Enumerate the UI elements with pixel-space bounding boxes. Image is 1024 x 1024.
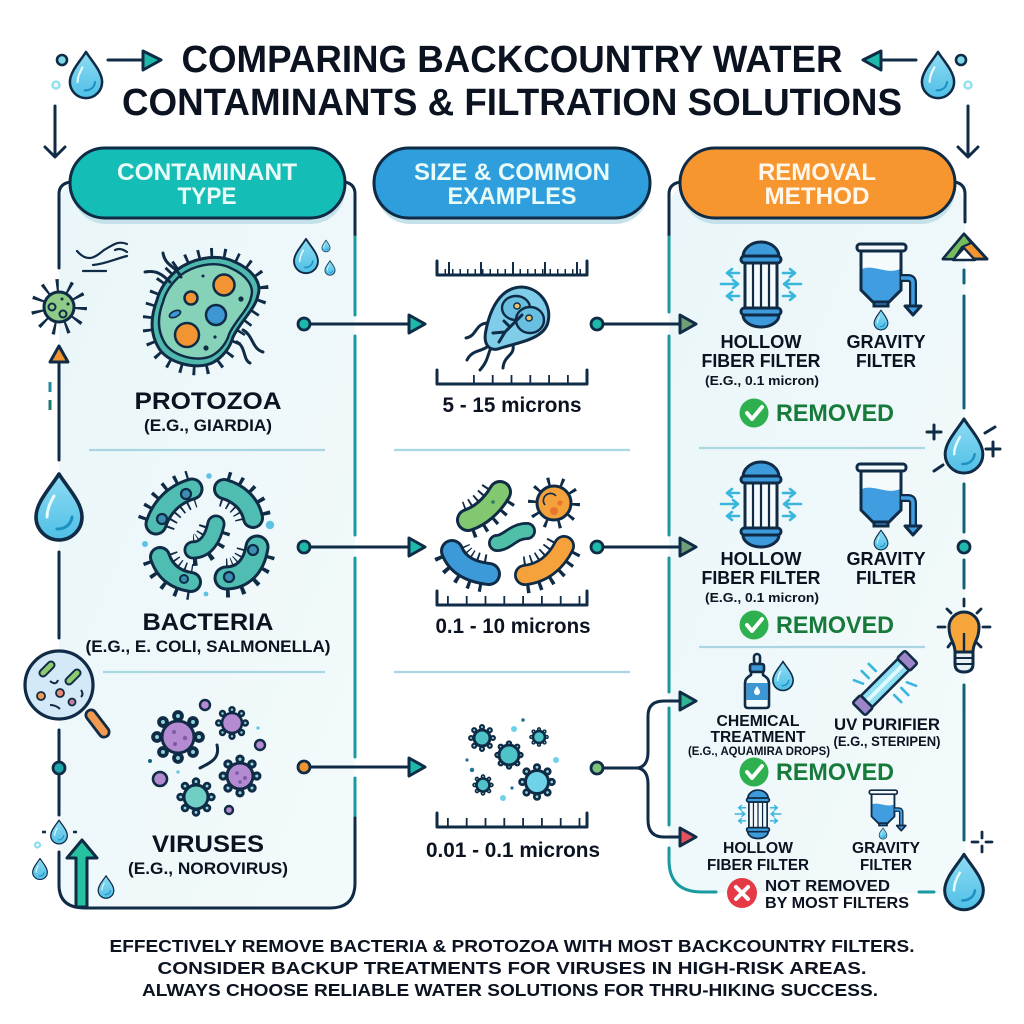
label: gravity filter (846, 332, 926, 371)
row: virus removal (688, 639, 940, 912)
header: removal method (680, 148, 955, 224)
label: hollow fiber filter: FIBER FILTER (702, 568, 821, 588)
icon: gravity filter (857, 244, 921, 330)
header: contaminant type: TYPE (178, 183, 236, 210)
label: viruses: VIRUSES (152, 831, 264, 858)
label: gravity filter: GRAVITY (852, 840, 921, 857)
icon: hollow fiber filter (721, 462, 801, 547)
label: chemical treatment: TREATMENT (710, 729, 806, 746)
icon: water drops near protozoa (294, 239, 335, 275)
label: hollow fiber filter: FIBER FILTER (707, 857, 809, 874)
panel: removal method (669, 148, 965, 912)
icon: protozoa cell (145, 253, 263, 366)
arrow: orange up arrow (50, 346, 68, 410)
label: uv purifier: UV PURIFIER (834, 715, 940, 734)
header: size and common examples (374, 148, 650, 224)
label: hollow fiber filter: HOLLOW (720, 549, 802, 569)
icon: small virus particles (465, 718, 559, 801)
footer summary (110, 936, 914, 1000)
icon: mountain (943, 234, 987, 260)
label: protozoa size: 5 - 15 microns (442, 394, 582, 417)
icon: virus cluster (148, 700, 265, 815)
arrow: green up arrow (67, 840, 97, 907)
arrow: protozoa size to removal (591, 315, 696, 333)
status: removed: REMOVED (776, 400, 894, 427)
row: bacteria removal (702, 462, 926, 640)
status: removed: REMOVED (776, 759, 894, 786)
title: COMPARING BACKCOUNTRY WATER (182, 39, 842, 81)
label: gravity filter: GRAVITY (846, 549, 926, 569)
label: gravity filter (852, 840, 921, 874)
label: viruses (128, 831, 288, 878)
label: viruses: (E.G., NOROVIRUS) (128, 860, 288, 878)
chart: virus size scale (437, 813, 587, 827)
header: contaminant type: CONTAMINANT (117, 159, 297, 186)
decoration: top left drop and arrows (45, 51, 161, 157)
footer summary: CONSIDER BACKUP TREATMENTS FOR VIRUSES IN HIGH-RISK AREAS. (158, 958, 866, 978)
status: not removed: NOT REMOVED (765, 878, 890, 895)
footer summary: EFFECTIVELY REMOVE BACTERIA & PROTOZOA WITH MOST BACKCOUNTRY FILTERS. (110, 936, 914, 956)
icon: magnifier with microbes (25, 651, 104, 732)
icon: stream ripple (77, 243, 127, 271)
chart: protozoa size scale (437, 261, 587, 275)
label: uv purifier (834, 715, 940, 749)
status: not removed: BY MOST FILTERS (765, 895, 909, 912)
status: not removed (727, 878, 909, 912)
label: protozoa: (E.G., GIARDIA) (144, 417, 272, 435)
label: hollow fiber filter: (E.G., 0.1 micron) (705, 373, 819, 388)
label: chemical treatment: (E.G., AQUAMIRA DROPS) (688, 746, 830, 758)
footer summary: ALWAYS CHOOSE RELIABLE WATER SOLUTIONS FOR THRU-HIKING SUCCESS. (142, 980, 878, 1000)
header: size and common examples: EXAMPLES (448, 183, 576, 210)
label: hollow fiber filter (702, 332, 821, 388)
header: size and common examples: SIZE & COMMON (414, 159, 610, 186)
row: protozoa removal (702, 242, 926, 428)
title: CONTAMINANTS & FILTRATION SOLUTIONS (122, 82, 902, 124)
title (122, 39, 902, 124)
arrow: viruses to size (298, 758, 425, 776)
icon: sparkle (972, 832, 992, 852)
status: removed (740, 758, 894, 786)
label: chemical treatment: CHEMICAL (716, 713, 800, 730)
icon: large water drop bottom right (945, 854, 983, 910)
label: hollow fiber filter: HOLLOW (720, 332, 802, 352)
header: contaminant type (70, 148, 345, 224)
label: bacteria (86, 609, 330, 656)
arrow: bacteria to size (298, 538, 425, 556)
icon: uv purifier (841, 639, 929, 727)
icon: bacteria cluster (142, 473, 274, 596)
icon: small hollow fiber filter (735, 790, 781, 839)
status: removed (740, 610, 894, 640)
label: hollow fiber filter: HOLLOW (723, 840, 793, 857)
chart: protozoa lower scale (437, 370, 587, 384)
label: uv purifier: (E.G., STERIPEN) (834, 734, 940, 749)
icon: chemical dropper bottle (745, 654, 793, 708)
label: bacteria size: 0.1 - 10 microns (436, 615, 590, 638)
chart: bacteria size scale (437, 591, 587, 605)
label: chemical treatment (688, 713, 830, 758)
icon: light bulb (938, 599, 990, 672)
icon: small microbe on left edge (38, 286, 80, 328)
panel: size and common examples (374, 148, 650, 862)
label: bacteria: BACTERIA (142, 609, 274, 636)
panel: contaminant type (59, 148, 355, 908)
icon: common bacteria (452, 482, 576, 575)
icon: hollow fiber filter (721, 242, 801, 327)
label: gravity filter: GRAVITY (846, 332, 926, 352)
arrow: protozoa to size (298, 315, 425, 333)
label: bacteria: (E.G., E. COLI, SALMONELLA) (86, 638, 330, 656)
status: removed (740, 398, 894, 428)
icon: large water drop left (36, 474, 82, 540)
label: hollow fiber filter: FIBER FILTER (702, 351, 821, 371)
label: hollow fiber filter (702, 549, 821, 605)
header: removal method: REMOVAL (758, 159, 876, 186)
label: protozoa: PROTOZOA (134, 388, 282, 415)
icon: giardia (466, 287, 549, 370)
label: hollow fiber filter (707, 840, 809, 874)
arrow: virus size branching to removal outcomes (591, 692, 696, 846)
label: virus size: 0.01 - 0.1 microns (426, 839, 600, 862)
icon: water drop with sparkles right (927, 419, 1000, 473)
label: gravity filter (846, 549, 926, 588)
label: gravity filter: FILTER (860, 857, 912, 874)
label: gravity filter: FILTER (856, 568, 916, 588)
label: hollow fiber filter: (E.G., 0.1 micron) (705, 590, 819, 605)
header: removal method: METHOD (764, 183, 870, 210)
label: protozoa (134, 388, 282, 435)
icon: dot on left edge (53, 762, 65, 774)
arrow: bacteria size to removal (591, 538, 696, 556)
icon: dot on right edge (958, 541, 970, 553)
label: gravity filter: FILTER (856, 351, 916, 371)
status: removed: REMOVED (776, 612, 894, 639)
icon: gravity filter (857, 464, 921, 550)
icon: small drops lower left (33, 820, 114, 898)
icon: small gravity filter (869, 790, 906, 839)
decoration: top right drop and arrows (863, 51, 978, 157)
